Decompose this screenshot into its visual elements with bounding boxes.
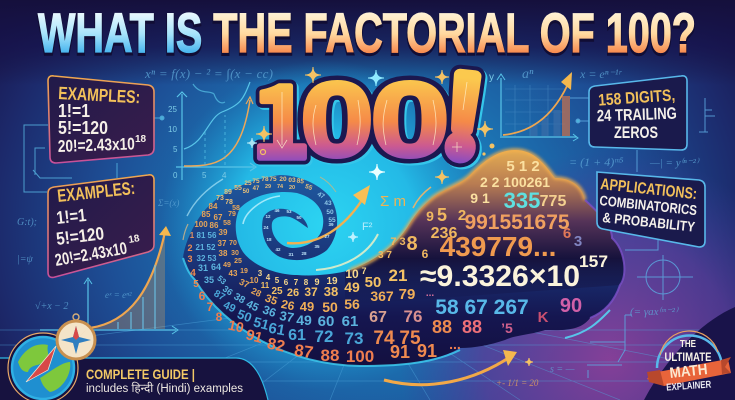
cloud numbers: 5 1 2	[506, 158, 540, 175]
faint formulas: (= γax⁽ᵐ⁻²⁾	[630, 306, 679, 318]
fifth arc numbers: 11	[261, 281, 270, 290]
outer arc numbers: 10	[227, 317, 246, 336]
outer arc numbers: 82	[265, 335, 287, 356]
cloud numbers: 2	[458, 207, 466, 224]
outer arc numbers: 100	[346, 347, 374, 366]
big numeral 100!: 0	[302, 63, 376, 181]
third arc numbers: 60	[318, 313, 334, 330]
left side numbers: 56	[208, 231, 217, 240]
left side numbers: 84	[209, 202, 218, 211]
big numeral 100!: 1	[252, 42, 310, 187]
swirl small numbers: 12	[265, 214, 271, 219]
icon: globe	[8, 333, 78, 400]
panel text: 158 digits: ZEROS	[614, 124, 658, 142]
cloud numbers: 236	[431, 225, 457, 242]
swirl small numbers: 53	[286, 209, 292, 214]
big numeral 100!: 1	[254, 44, 312, 189]
fifth arc numbers: 37	[304, 285, 318, 299]
second arc numbers: ’5	[501, 320, 513, 336]
arch numbers: 85	[296, 177, 305, 186]
swirl small numbers: 18	[266, 237, 272, 242]
panel text: examples list repeated: 20!=2.43x10	[53, 239, 129, 270]
chart: upper left graph	[168, 82, 256, 180]
left side numbers: 30	[231, 250, 239, 257]
arch numbers: 47	[253, 186, 260, 192]
text: complete guide	[86, 367, 243, 395]
arch numbers: 75	[252, 178, 260, 185]
big numeral 100!: 0	[300, 61, 374, 179]
left side numbers: 85	[202, 210, 211, 219]
second arc numbers: 73	[345, 329, 363, 348]
left side numbers: 58	[223, 220, 231, 227]
panel text: 158 digits: 158 DIGITS,	[598, 86, 676, 110]
fifth arc numbers: 50	[365, 274, 381, 291]
third arc numbers	[221, 284, 422, 330]
left side numbers: 37	[238, 277, 251, 290]
third arc numbers: 36	[261, 302, 278, 320]
left side numbers: 32	[197, 254, 206, 263]
outer arc numbers: 91	[244, 326, 264, 347]
fifth arc numbers: 49	[344, 279, 360, 295]
big numeral 100!: 1	[252, 42, 310, 187]
approximation value	[420, 252, 608, 293]
left side numbers: 86	[210, 221, 219, 230]
number field: spiral columns	[187, 158, 582, 366]
chart: upper left graph: 5	[173, 145, 178, 154]
chart: upper left graph: 25	[168, 105, 177, 114]
icon: compass	[57, 314, 95, 359]
cloud numbers	[378, 158, 582, 326]
panel text: examples list repeated	[53, 178, 141, 270]
arch numbers: 29	[265, 184, 271, 190]
second arc numbers: 51	[252, 313, 271, 333]
third arc numbers: 36	[221, 284, 235, 298]
cloud numbers: 8	[406, 233, 418, 255]
third arc numbers: 45	[244, 298, 260, 314]
second arc numbers: 49	[221, 299, 237, 315]
formula near swirl: Σ m	[380, 193, 406, 210]
fourth arc numbers: 49	[300, 299, 314, 314]
faint formulas: x = eⁿ⁻¹ʳ	[579, 67, 622, 81]
second arc numbers: 88	[432, 317, 452, 337]
big numeral 100!	[252, 31, 494, 191]
sixth arc numbers: 4	[266, 273, 271, 282]
cloud numbers: 90	[560, 295, 582, 317]
cloud numbers: 2 2 100261	[480, 174, 550, 190]
big numeral 100!: !	[436, 31, 492, 189]
arch numbers	[216, 176, 336, 224]
arch numbers: 03	[288, 177, 296, 184]
third arc numbers: 61	[342, 313, 358, 330]
second arc numbers	[212, 288, 513, 349]
panel text: examples list: EXAMPLES:	[58, 83, 141, 107]
left side numbers: 58	[232, 205, 240, 212]
arch numbers: 89	[224, 189, 232, 196]
second arc numbers: 74	[373, 328, 395, 349]
third arc numbers: 37	[278, 308, 295, 325]
sparkles	[247, 67, 533, 366]
panel text: applications	[599, 176, 698, 235]
badge: the ultimate math explainer: ULTIMATE	[664, 350, 712, 364]
swirl small numbers: 31	[288, 252, 294, 257]
fourth arc numbers: 367	[370, 288, 394, 304]
second arc numbers: 75	[399, 328, 421, 349]
faint formulas: xⁿ = f(x) − ² = ∫(x − cc)	[144, 66, 273, 82]
panel text: examples list: 20!=2.43x10	[57, 134, 135, 156]
left side numbers: 64	[211, 262, 221, 272]
sixth arc numbers: 19	[326, 276, 338, 287]
panel text: applications: COMBINATORICS	[599, 192, 698, 218]
connector lines left	[24, 116, 164, 192]
second arc numbers: 61	[267, 320, 286, 339]
panel: digits and trailing zeros	[589, 76, 687, 150]
fourth arc numbers: ...	[426, 288, 434, 299]
faint formulas: |=ψ	[17, 254, 33, 265]
cloud numbers: 3 7	[378, 250, 392, 261]
faint formulas: = (1 + 4)ᵐ⁵	[569, 155, 623, 169]
left side numbers: 37	[218, 239, 227, 248]
text: complete guide: COMPLETE GUIDE |	[86, 367, 195, 382]
panel text: examples list repeated: EXAMPLES:	[56, 178, 136, 206]
arch numbers: 50	[243, 189, 250, 195]
sixth arc numbers: 3	[258, 269, 263, 278]
arch numbers: 50	[326, 209, 334, 216]
left side numbers: 81	[197, 231, 206, 240]
cloud numbers: 6	[563, 225, 571, 242]
swirl small numbers: 50	[296, 215, 302, 220]
fourth arc numbers: 26	[280, 297, 296, 313]
approximation value: 157	[579, 252, 608, 271]
cloud numbers: 9	[426, 208, 434, 224]
chart: upper right growth graph: y	[489, 72, 494, 83]
panel text: 158 digits: 24 TRAILING	[597, 105, 677, 125]
big numeral 100!: 0	[300, 61, 374, 179]
sixth arc numbers: 7	[361, 266, 367, 276]
chart: upper left graph: 0	[173, 171, 178, 180]
chart: lower left graph	[40, 226, 178, 334]
fourth arc numbers: 56	[344, 296, 360, 312]
third arc numbers: 76	[404, 307, 422, 326]
left side numbers: 19	[240, 268, 248, 275]
panel: examples top	[48, 76, 154, 163]
left side numbers: 25	[234, 258, 242, 265]
cloud numbers: K	[538, 309, 549, 326]
faint formulas: G:t);	[17, 217, 37, 228]
second arc numbers: 72	[315, 327, 333, 346]
sixth arc numbers: 7	[294, 278, 299, 287]
formula near swirl: F²	[362, 221, 373, 233]
panel text: examples list: 5!=120	[58, 118, 108, 138]
sixth arc numbers: 6	[284, 278, 289, 287]
left side numbers: 53	[215, 274, 228, 287]
outer arc numbers: 91	[417, 341, 437, 361]
outer arc numbers: 7	[207, 300, 214, 314]
left side numbers: 100	[194, 220, 208, 229]
panel: examples bottom	[48, 175, 154, 277]
dark corner: bottom right	[644, 307, 735, 400]
panel text: applications: APPLICATIONS:	[600, 176, 698, 203]
spiral of numbers: dark body and cloud	[183, 150, 624, 366]
second arc numbers: 61	[288, 327, 306, 344]
big numeral 100!: !	[436, 31, 492, 189]
badge: the ultimate math explainer: MATH	[669, 361, 708, 382]
panel text: examples list repeated: 1!=1	[55, 205, 87, 228]
faint formulas: eˣ = eⁿ²	[105, 290, 132, 300]
cloud numbers: 58 67 267	[435, 296, 529, 319]
faint formulas: —| = y⁽ⁿ⁻²⁾	[649, 157, 700, 169]
left side numbers: 79	[228, 211, 236, 218]
fourth arc numbers: 50	[322, 299, 338, 315]
third arc numbers: 38	[232, 291, 247, 307]
arch numbers: 74	[277, 184, 284, 190]
chart: upper right growth graph	[489, 72, 578, 141]
faint formulas: s = —	[550, 364, 575, 375]
sixth arc numbers: 5	[275, 276, 280, 285]
left side numbers: 1	[190, 231, 195, 240]
fourth arc numbers: 35	[263, 292, 279, 308]
decoration: connector lines right	[570, 98, 715, 378]
left side numbers: 28	[250, 286, 263, 299]
cloud numbers: 7 3	[390, 236, 406, 248]
badge: the ultimate math explainer: EXPLAINER	[666, 379, 712, 394]
left side numbers: 10	[250, 276, 259, 285]
cloud numbers: 3	[574, 233, 582, 250]
formula near swirl	[362, 193, 406, 233]
fifth arc numbers: 26	[287, 287, 299, 299]
sixth arc numbers	[258, 266, 367, 287]
panel text: applications: & PROBABILITY	[602, 209, 696, 235]
outer arc numbers: 87	[293, 341, 314, 362]
arch numbers: 75	[269, 176, 277, 183]
swirl small numbers: 27	[324, 234, 330, 239]
swirl small numbers: 46	[274, 208, 280, 213]
outer arc numbers: ...	[449, 336, 461, 352]
chart: upper left graph: 5	[202, 171, 207, 180]
left side numbers: 3	[187, 254, 193, 264]
big numeral 100!: 0	[372, 62, 452, 181]
cloud numbers: 6	[422, 247, 429, 261]
left side numbers: 49	[223, 262, 231, 269]
faint formulas: aⁿ	[522, 67, 534, 82]
panel text: examples list: 18	[135, 134, 147, 145]
footer banner	[0, 314, 268, 400]
arch numbers: 20	[289, 185, 295, 191]
left side numbers: 70	[229, 240, 237, 247]
badge: the ultimate math explainer: THE	[680, 339, 696, 350]
outer arc numbers: 88	[321, 346, 339, 365]
arch numbers: 73	[216, 195, 224, 202]
big numeral 100!: !	[438, 33, 494, 191]
arch numbers: 25	[244, 180, 252, 187]
sixth arc numbers: 8	[304, 278, 309, 287]
cloud numbers: 5	[437, 205, 447, 225]
arch numbers: 55	[234, 185, 242, 192]
outer arc numbers	[199, 289, 461, 366]
chart: upper left graph: 4	[222, 171, 227, 180]
cloud numbers: 991551675	[464, 211, 570, 234]
cloud numbers: 439779...	[440, 231, 556, 262]
left side numbers: 53	[208, 254, 217, 263]
swirl small numbers: 35	[314, 244, 320, 249]
sixth arc numbers: 9	[314, 277, 320, 287]
approximation value: ≈9.3326×10	[420, 260, 580, 293]
left side numbers: 52	[207, 243, 216, 252]
fifth arc numbers: 38	[324, 284, 338, 299]
badge: the ultimate math explainer	[647, 331, 731, 394]
cyan swirl highlights and arrow	[183, 177, 431, 270]
fourth arc numbers	[263, 286, 434, 315]
second arc numbers: 87	[212, 288, 227, 304]
outer arc numbers: 8	[216, 310, 223, 324]
panel: applications	[597, 172, 705, 247]
left side numbers: 4	[190, 268, 196, 279]
fifth arc numbers: 25	[271, 286, 283, 297]
left side numbers: 38	[219, 249, 228, 258]
outer arc numbers: 91	[390, 342, 410, 362]
left side numbers: 21	[196, 243, 205, 252]
left side numbers: 43	[229, 269, 238, 278]
arch numbers: 47	[316, 191, 326, 201]
fourth arc numbers: 79	[399, 286, 415, 303]
cloud numbers: 9 1	[470, 190, 490, 206]
arch numbers: 55	[328, 217, 336, 224]
fifth arc numbers: 21	[389, 266, 407, 285]
left side numbers: 39	[219, 228, 228, 237]
arch numbers: 55	[304, 183, 313, 192]
left side numbers: 5	[193, 279, 199, 290]
sixth arc numbers: 10	[345, 267, 359, 281]
panel text: examples list repeated: 5!=120	[55, 223, 105, 249]
faint formulas: +- 1/1 = 20	[496, 378, 539, 388]
swirl small numbers: 24	[263, 225, 269, 230]
arch numbers: 78	[225, 199, 233, 206]
faint formulas: √+x − 2	[35, 301, 68, 312]
big numeral 100!: 0	[370, 60, 450, 179]
swirl small numbers: 39	[328, 222, 334, 227]
swirl small numbers: 28	[301, 251, 307, 256]
left side numbers: 67	[214, 213, 223, 222]
swirl small numbers	[263, 208, 334, 257]
outer arc numbers: 6	[199, 289, 206, 303]
cloud numbers: 775	[540, 193, 566, 210]
faint formulas	[17, 66, 700, 388]
left side numbers: 2	[187, 243, 193, 253]
third arc numbers: 49	[296, 312, 312, 328]
second arc numbers: 88	[462, 317, 482, 337]
panel text: examples list: 1!=1	[58, 101, 90, 121]
left side numbers: 35	[204, 275, 214, 285]
swirl small numbers: 42	[275, 247, 281, 252]
arch numbers: 20	[279, 176, 287, 183]
panel text: examples list	[57, 83, 147, 156]
cloud numbers: 335	[504, 188, 540, 213]
second arc numbers: 50	[235, 306, 254, 325]
arch numbers: 43	[324, 200, 332, 207]
fifth arc numbers	[261, 266, 407, 299]
perspective grid floor	[0, 300, 735, 400]
panel text: examples list repeated: 18	[128, 233, 141, 246]
left side numbers	[187, 202, 263, 299]
chart: upper left graph: 10	[168, 125, 177, 134]
left side numbers: 31	[198, 263, 208, 273]
big numeral 100!: 0	[370, 60, 450, 179]
arch numbers: 78	[261, 176, 269, 183]
faint formulas: Σ=(x)	[157, 198, 179, 208]
text: complete guide: includes हिन्दी (Hindi) examples	[86, 381, 243, 395]
panel text: 158 digits	[597, 86, 677, 142]
arrow: lower orange swoosh	[384, 310, 610, 385]
third arc numbers: 67	[369, 309, 387, 326]
